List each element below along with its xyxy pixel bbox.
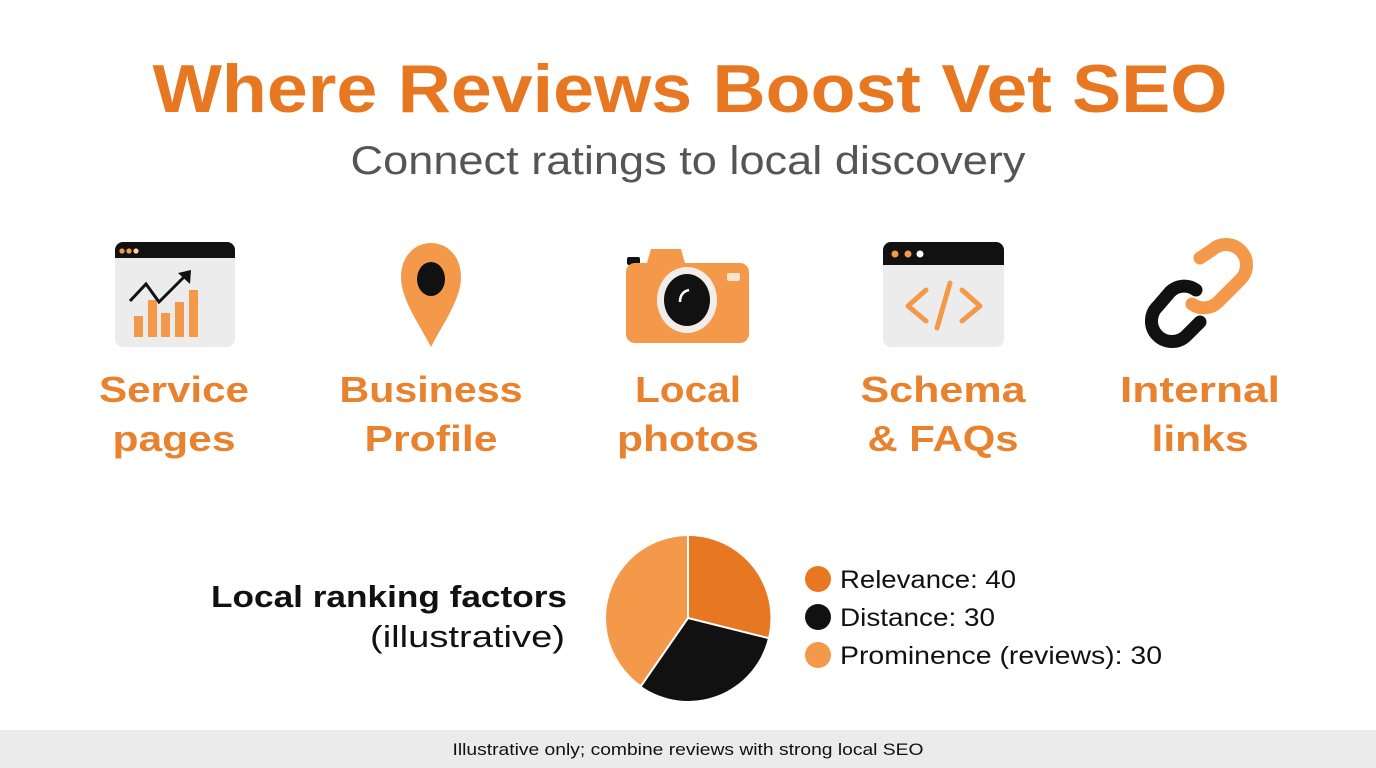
icon: chain link — [1151, 244, 1247, 342]
label: service pages: pages — [112, 418, 236, 459]
chart label — [211, 579, 567, 654]
label: local photos: Local — [635, 369, 741, 410]
label: business profile: Business — [340, 369, 522, 410]
legend — [805, 566, 1162, 670]
footer: Illustrative only; combine reviews with strong local SEO — [452, 740, 924, 759]
chart label: (illustrative) — [370, 619, 565, 654]
label: business profile — [340, 369, 522, 459]
labels — [99, 369, 1280, 459]
legend: Prominence (reviews): 30 — [840, 642, 1162, 670]
subtitle: Connect ratings to local discovery — [350, 139, 1026, 183]
icon: map pin — [401, 243, 461, 347]
legend: Distance: 30 — [840, 604, 995, 632]
label: local photos — [617, 369, 759, 459]
legend: Relevance: 40 — [840, 566, 1016, 594]
label: schema faqs: Schema — [860, 369, 1027, 410]
footer — [0, 730, 1376, 768]
label: schema faqs — [860, 369, 1027, 459]
title: Where Reviews Boost Vet SEO — [152, 51, 1228, 127]
label: internal links: Internal — [1120, 369, 1280, 410]
chart label: Local ranking factors — [211, 579, 567, 614]
label: local photos: photos — [617, 418, 759, 459]
label: schema faqs: & FAQs — [868, 418, 1018, 459]
icon: analytics browser — [115, 242, 235, 347]
label: service pages: Service — [99, 369, 249, 410]
icon: camera — [626, 249, 749, 343]
pie chart — [606, 536, 770, 701]
label: service pages — [99, 369, 249, 459]
label: business profile: Profile — [364, 418, 498, 459]
icon: code browser — [883, 242, 1004, 347]
label: internal links: links — [1152, 418, 1248, 459]
label: internal links — [1120, 369, 1280, 459]
